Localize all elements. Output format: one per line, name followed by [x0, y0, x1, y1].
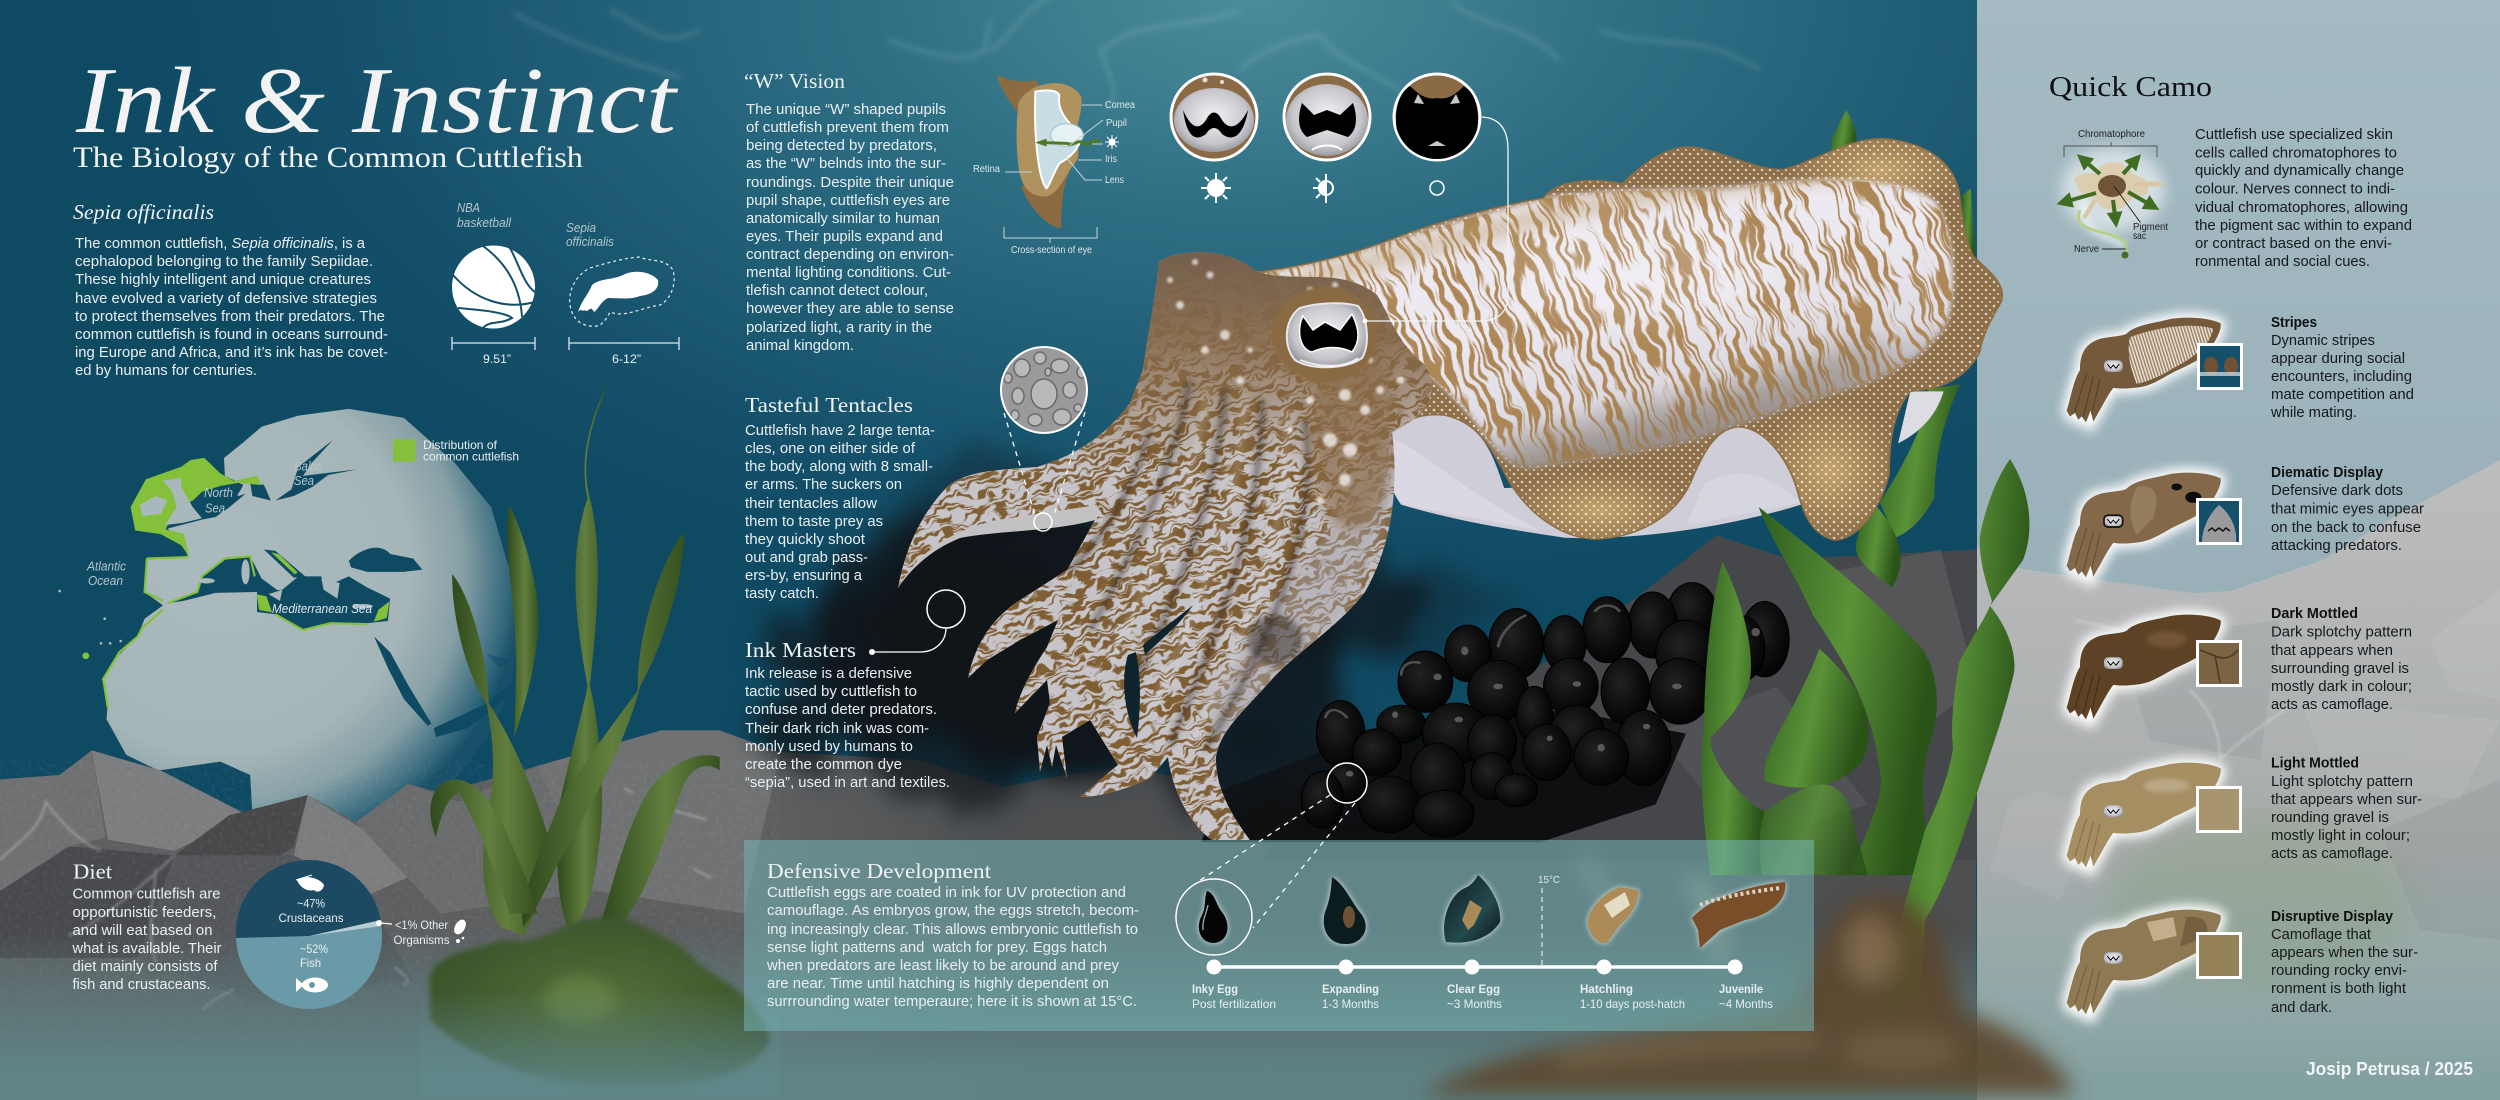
text block: W Vision: contract depending on environ-: [746, 247, 954, 263]
icon: full sun: [1201, 173, 1231, 203]
dark mottled text: acts as camoflage.: [2271, 696, 2393, 713]
text block: Diet: fish and crustaceans.: [72, 977, 210, 993]
stripes text: while mating.: [2270, 404, 2357, 421]
mantle body: [1260, 139, 2002, 540]
eye cross-section diagram: Lens: [1105, 174, 1124, 186]
text block: W Vision: polarized light, a rarity in the: [746, 320, 932, 336]
text block: W Vision: however they are able to sense: [746, 301, 954, 317]
text block: Tasteful Tentacles: them to taste prey as: [745, 514, 883, 530]
dark mottled text: surrounding gravel is: [2271, 660, 2409, 677]
callout: ink ring: [869, 590, 965, 655]
text block: Ink Masters: Their dark rich ink was com-: [745, 721, 929, 737]
gap between arms: [1124, 605, 1193, 738]
heading: Quick Camo: Quick Camo: [2049, 71, 2212, 103]
disruptive text: and dark.: [2271, 999, 2332, 1016]
dark mottled text: that appears when: [2271, 642, 2393, 659]
scale bar: cuttlefish: 6-12”: [612, 352, 641, 366]
distribution areas: [83, 458, 389, 708]
eye dark surround: [1273, 287, 1377, 383]
illustration: diematic cuttlefish: [2067, 473, 2221, 577]
text block: Sepia officinalis intro: to protect themselves from their predators. The: [75, 309, 385, 325]
stripes text: Dynamic stripes: [2271, 332, 2375, 349]
diematic text: on the back to confuse: [2271, 519, 2421, 536]
stripes text: [2270, 314, 2414, 421]
chromatophore diagram: [2061, 128, 2168, 258]
map legend: common cuttlefish: [423, 450, 519, 464]
text block: W Vision: of cuttlefish prevent them from: [746, 120, 949, 136]
diematic text: [2271, 464, 2424, 554]
frog-egg cluster: cuttlefish eggs: [1301, 583, 1789, 837]
text block: Ink Masters: “sepia”, used in art and textiles.: [745, 775, 950, 791]
illustration: stripes cuttlefish: [2067, 318, 2221, 422]
foreground fog: [0, 930, 1977, 1100]
ink cloud: [760, 450, 1490, 810]
disruptive text: rounding rocky envi-: [2271, 962, 2407, 979]
text block: Sepia officinalis intro: cephalopod belonging to the family Sepiidae.: [75, 254, 373, 270]
seaweed: left: [430, 382, 720, 936]
icon: fish: [296, 978, 328, 992]
light mottled text: acts as camoflage.: [2271, 845, 2393, 862]
inset: mixed gravel: [2198, 934, 2240, 978]
diematic text: that mimic eyes appear: [2271, 500, 2424, 518]
cuttlefish silhouette: [566, 220, 674, 326]
chromatophore diagram: Chromatophore: [2078, 128, 2145, 140]
panel body text: surrrounding water temperaure; here it is shown at 15°C.: [767, 994, 1137, 1010]
text block: W Vision: [744, 69, 954, 354]
timeline: 1-10 days post-hatch: [1580, 997, 1685, 1011]
text block: W Vision: The unique “W” shaped pupils: [746, 102, 946, 118]
icon: expanding egg: [1324, 877, 1366, 944]
eye cross-section diagram: [973, 75, 1135, 256]
scale bar: cuttlefish: [569, 337, 679, 366]
dark mottled text: Dark splotchy pattern: [2271, 624, 2412, 640]
dark mottled text: Dark Mottled: [2271, 605, 2358, 622]
callout: egg magnifier dashes: [1176, 763, 1367, 955]
callout: tentacle suckers magnifier: [1001, 347, 1087, 531]
panel heading: Defensive Development: [767, 859, 991, 883]
disruptive text: [2271, 908, 2418, 1016]
stripes text: mate competition and: [2271, 386, 2414, 403]
intro text: or contract based on the envi-: [2195, 235, 2392, 252]
moss mound: [420, 915, 780, 1095]
scale bar: basketball: 9.51”: [483, 352, 511, 366]
text block: Ink Masters: create the common dye: [745, 757, 902, 773]
text block: Tasteful Tentacles: tasty catch.: [745, 586, 819, 602]
text block: Tasteful Tentacles: Cuttlefish have 2 large tenta-: [745, 423, 935, 439]
camo: Diematic Display: [2067, 464, 2424, 577]
text block: Ink Masters: [745, 638, 950, 791]
icon: inky egg: [1199, 891, 1228, 943]
illustration: light mottled cuttlefish: [2067, 763, 2221, 867]
timeline: Inky Egg: [1192, 982, 1238, 996]
map labels: [86, 458, 372, 616]
text block: Sepia officinalis intro: The common cuttlefish, Sepia officinalis, is a: [75, 236, 366, 252]
panel: right side background: [1977, 0, 2500, 1100]
text block: Tasteful Tentacles: the body, along with 8 small-: [745, 459, 933, 475]
intro text: the pigment sac within to expand: [2195, 217, 2412, 234]
pupil states: [1171, 74, 1508, 324]
icon: small sun: [1105, 135, 1119, 149]
temperature marker: [1538, 874, 1560, 967]
panel body text: sense light patterns and watch for prey. Eggs hatch: [767, 940, 1107, 956]
camo: Light Mottled: [2067, 754, 2422, 867]
seaweed behind cuttlefish: [1831, 111, 1976, 587]
camo: Disruptive Display: [2067, 908, 2418, 1016]
icon: dark circle: [1430, 181, 1444, 195]
camo: Stripes: [2067, 314, 2414, 422]
pie chart: diet: [236, 860, 468, 1009]
panel body text: camouflage. As embryos grow, the eggs stretch, becom-: [767, 903, 1139, 919]
moss haze: [2110, 810, 2410, 990]
intro text: Cuttlefish use specialized skin: [2195, 126, 2393, 143]
text block: Sepia officinalis intro: ed by humans for centuries.: [75, 363, 257, 379]
map land: [58, 409, 516, 822]
inset: rival cuttlefish: [2198, 344, 2242, 388]
timeline: ~3 Months: [1447, 997, 1502, 1011]
text block: Diet: opportunistic feeders,: [72, 905, 216, 921]
main eye: [1287, 303, 1367, 367]
icon: half sun: [1313, 174, 1333, 203]
map labels: Baltic: [294, 458, 322, 474]
diematic text: Diematic Display: [2271, 464, 2384, 481]
light mottled text: that appears when sur-: [2271, 791, 2422, 808]
text block: Tasteful Tentacles: ers-by, ensuring a: [745, 568, 863, 584]
light mottled text: rounding gravel is: [2271, 809, 2389, 826]
water caustics: [514, 0, 1760, 110]
text block: Ink Masters: confuse and deter predators.: [745, 702, 937, 718]
pie chart: diet: Fish: [300, 956, 321, 970]
text block: Diet: and will eat based on: [72, 923, 212, 939]
inset: shark: [2198, 500, 2240, 544]
camo: Dark Mottled: [2067, 605, 2412, 719]
intro text: [2195, 126, 2412, 270]
eye cross-section diagram: Pupil: [1106, 117, 1127, 129]
basketball: basketball: [457, 215, 512, 230]
timeline: Clear Egg: [1447, 982, 1500, 996]
dark rocks behind eggs: [1201, 535, 1977, 860]
intro text: quickly and dynamically change: [2195, 162, 2404, 179]
text block: Diet: diet mainly consists of: [72, 959, 218, 975]
foreground blurred cuttlefish: [1420, 860, 2075, 1095]
panel body text: ing increasingly clear. This allows embryonic cuttlefish to: [767, 922, 1138, 938]
text block: Sepia officinalis intro: These highly intelligent and unique creatures: [75, 272, 371, 288]
text block: W Vision: roundings. Despite their unique: [746, 175, 954, 191]
pie chart: diet: ~52%: [300, 942, 328, 956]
cuttlefish silhouette: Sepia: [566, 220, 596, 235]
stripes text: appear during social: [2271, 350, 2405, 367]
basketball: [452, 200, 535, 328]
eye cross-section diagram: Retina: [973, 163, 1000, 175]
callout: other organisms: [376, 918, 468, 947]
rock ridge centre: [780, 752, 1976, 1100]
panel: Quick Camo: [2049, 71, 2424, 1016]
panel body text: are near. Time until hatching is highly dependent on: [767, 976, 1109, 992]
eye cross-section diagram: Cross-section of eye: [1011, 244, 1092, 256]
disruptive text: ronment is both light: [2271, 980, 2407, 997]
bright light eye: [1171, 74, 1257, 160]
text block: Diet: [71, 860, 222, 993]
panel: world map: [58, 409, 519, 822]
diematic text: attacking predators.: [2271, 537, 2402, 554]
disruptive text: Camoflage that: [2271, 926, 2372, 943]
icon: eye section: [997, 75, 1100, 228]
panel body text: when predators are least likely to be around and prey: [766, 958, 1120, 974]
text block: Ink Masters: Ink release is a defensive: [745, 666, 912, 682]
panel: Defensive Development: [744, 763, 1814, 1031]
text block: Sepia officinalis intro: [73, 200, 388, 379]
callout: other organisms: <1% Other: [395, 918, 448, 932]
map legend: Distribution of: [423, 438, 498, 452]
map labels: Ocean: [88, 573, 123, 588]
intro text: vidual chromatophores, allowing: [2195, 199, 2408, 216]
icon: hatchling: [1588, 887, 1638, 943]
text block: Tasteful Tentacles: they quickly shoot: [745, 532, 865, 548]
illustration: disruptive cuttlefish: [2067, 910, 2221, 1014]
text block: W Vision: animal kingdom.: [746, 338, 854, 354]
timeline: Juvenile: [1719, 982, 1763, 996]
text block: Diet: what is available. Their: [71, 941, 222, 957]
text block: Ink Masters: Ink Masters: [745, 638, 856, 662]
dark eye: [1394, 74, 1480, 160]
text block: Sepia officinalis intro: ing Europe and Africa, and it’s ink has be covet-: [75, 345, 388, 361]
connector: eye to pupil: [1362, 117, 1508, 324]
intro text: ronmental and social cues.: [2195, 253, 2370, 270]
text block: Tasteful Tentacles: out and grab pass-: [745, 550, 868, 566]
panel body text: [766, 885, 1139, 1010]
text block: W Vision: “W” Vision: [744, 69, 845, 93]
stripes text: Stripes: [2271, 314, 2317, 331]
text block: Sepia officinalis intro: common cuttlefish is found in oceans surround-: [75, 327, 388, 343]
icon: clear egg: [1444, 875, 1500, 943]
mantle outline: [1256, 139, 2002, 540]
callout: other organisms: Organisms: [394, 933, 450, 947]
eye cross-section diagram: Cornea: [1105, 99, 1135, 111]
diematic text: Defensive dark dots: [2271, 482, 2403, 499]
pie chart: diet: ~47%: [297, 896, 325, 910]
text block: W Vision: pupil shape, cuttlefish eyes are: [746, 193, 950, 209]
main cuttlefish illustration: [613, 0, 2236, 1097]
text block: W Vision: mental lighting conditions. Cut-: [746, 265, 951, 281]
text block: Diet: Common cuttlefish are: [72, 886, 220, 902]
text block: Sepia officinalis intro: have evolved a variety of defensive strategies: [75, 291, 377, 307]
inset: light gravel: [2198, 788, 2240, 832]
timeline: [1192, 960, 1773, 1011]
light mottled text: Light splotchy pattern: [2271, 773, 2413, 790]
map labels: Sea: [294, 473, 314, 488]
fin underside: [1385, 391, 1944, 538]
text block: W Vision: being detected by predators,: [746, 138, 937, 154]
text block: W Vision: anatomically similar to human: [746, 211, 940, 227]
text block: W Vision: eyes. Their pupils expand and: [746, 229, 943, 245]
text block: Diet: Diet: [73, 860, 112, 884]
illustration: dark mottled cuttlefish: [2067, 615, 2221, 719]
map labels: Sea: [205, 500, 225, 516]
credit: Josip Petrusa / 2025: [2306, 1059, 2473, 1079]
panel body text: Cuttlefish eggs are coated in ink for UV protection and: [767, 885, 1126, 901]
text block: Ink Masters: monly used by humans to: [745, 739, 913, 755]
light mottled text: Light Mottled: [2271, 754, 2359, 772]
text block: Tasteful Tentacles: er arms. The suckers on: [745, 477, 902, 493]
basketball: NBA: [457, 200, 480, 215]
icon: shrimp: [296, 875, 324, 892]
timeline: Hatchling: [1580, 982, 1633, 996]
intro text: colour. Nerves connect to indi-: [2195, 180, 2395, 198]
temperature marker: 15°C: [1538, 874, 1560, 886]
map labels: Mediterranean Sea: [272, 601, 372, 616]
seaweed: right front: [1702, 459, 2029, 1030]
chromatophore diagram: Pigment: [2133, 221, 2168, 233]
light mottled text: mostly light in colour;: [2271, 827, 2410, 844]
cuttlefish silhouette: officinalis: [566, 234, 614, 249]
timeline: Expanding: [1322, 982, 1379, 996]
light mottled text: [2271, 754, 2422, 862]
subtitle: The Biology of the Common Cuttlefish: [73, 141, 583, 174]
timeline: ~4 Months: [1719, 997, 1773, 1011]
text block: Sepia officinalis intro: Sepia officinalis: [73, 200, 214, 224]
map labels: North: [204, 485, 233, 500]
map labels: Atlantic: [86, 558, 126, 574]
disruptive text: appears when the sur-: [2271, 944, 2418, 961]
text block: W Vision: as the “W” belnds into the sur-: [746, 156, 946, 172]
stripes text: encounters, including: [2271, 368, 2412, 385]
dark mottled text: mostly dark in colour;: [2271, 678, 2412, 695]
chromatophore diagram: Nerve: [2074, 243, 2099, 255]
scale bar: basketball: [452, 337, 535, 366]
eye labels: [1004, 105, 1103, 243]
intro text: cells called chromatophores to: [2195, 144, 2397, 162]
disruptive text: Disruptive Display: [2271, 908, 2394, 925]
text block: Tasteful Tentacles: cles, one on either side of: [745, 441, 916, 457]
text block: Ink Masters: tactic used by cuttlefish to: [745, 684, 917, 700]
inset: dark gravel: [2198, 642, 2240, 686]
dark mottled text: [2271, 605, 2412, 713]
timeline: Post fertilization: [1192, 997, 1276, 1011]
text block: W Vision: tlefish cannot detect colour,: [746, 283, 928, 299]
text block: Tasteful Tentacles: their tentacles allow: [745, 496, 878, 512]
text block: Tasteful Tentacles: [745, 393, 935, 602]
rocks: left and centre: [0, 535, 1977, 1100]
arms and tentacles: [898, 252, 1432, 840]
map legend: [393, 438, 519, 464]
rocks: right side: [1977, 460, 2500, 1100]
pie chart: diet: Crustaceans: [278, 911, 344, 925]
dim light eye: [1284, 74, 1370, 160]
size comparison: [452, 200, 679, 366]
eye cross-section diagram: Iris: [1105, 153, 1117, 165]
text block: Tasteful Tentacles: Tasteful Tentacles: [745, 393, 913, 417]
chromatophore diagram: sac: [2133, 230, 2146, 242]
title: Ink & Instinct: [75, 49, 678, 153]
icon: juvenile: [1692, 882, 1785, 948]
timeline: 1-3 Months: [1322, 997, 1379, 1011]
